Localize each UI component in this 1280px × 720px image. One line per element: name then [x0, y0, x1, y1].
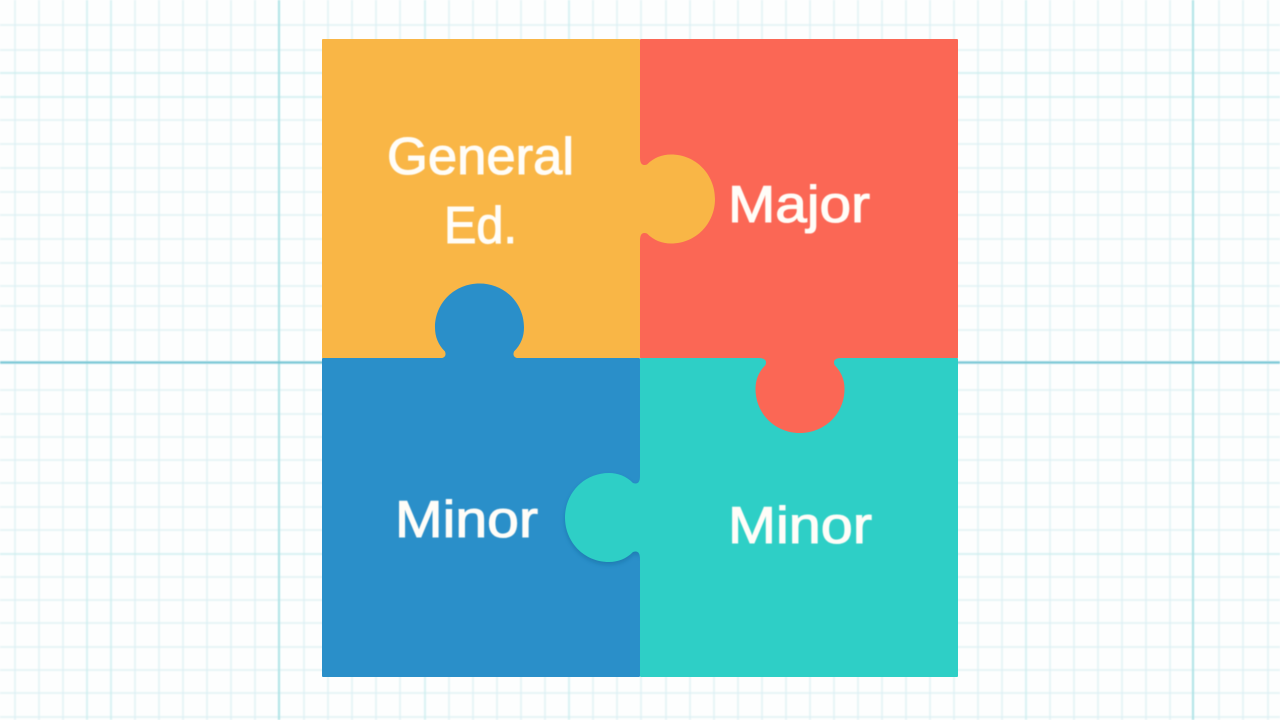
piece: Major (red) — [640, 39, 958, 358]
label: General Ed.: Ed. — [444, 197, 517, 255]
label: Major: Major — [728, 176, 870, 234]
label: Minor (blue piece): Minor — [395, 491, 538, 549]
tab: teal connector into blue — [565, 473, 640, 564]
label: Minor (teal piece): Minor — [728, 497, 872, 555]
label: General Ed. — [387, 128, 574, 255]
piece: General Ed. (orange) — [322, 39, 640, 358]
tab: orange connector into red — [640, 154, 715, 244]
tab: blue connector into orange — [435, 284, 524, 358]
piece: Minor (teal) — [640, 358, 958, 677]
piece: Minor (blue) — [322, 358, 640, 677]
label: General Ed.: General — [387, 128, 574, 186]
jigsaw puzzle — [322, 39, 958, 677]
tab: red connector into teal — [756, 358, 844, 433]
